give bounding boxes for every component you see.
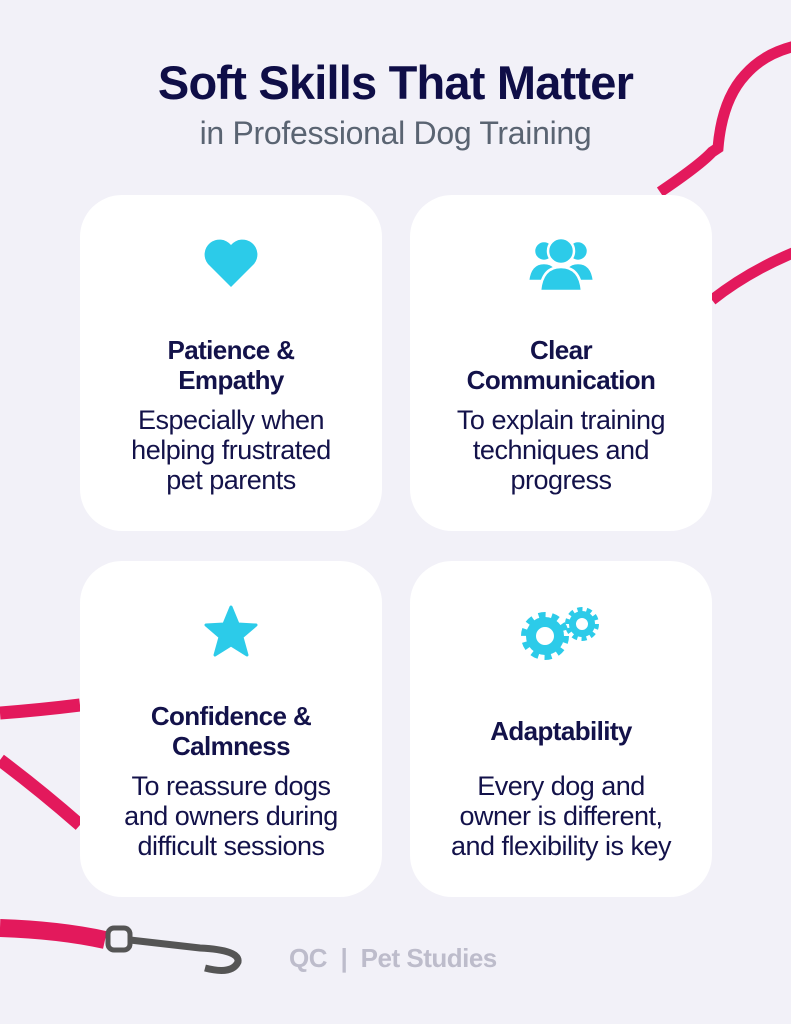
text: pet parents [166,465,296,495]
icon: people [530,239,592,290]
heading: Adaptability [490,716,632,746]
text [124,771,338,861]
text [457,405,665,495]
heading [151,701,311,761]
panel: adaptability [410,561,712,897]
heading: Communication [467,365,655,395]
icon: gears [521,607,599,660]
heading [168,335,294,395]
logo: QC | Pet Studies [289,943,497,973]
text: progress [510,465,612,495]
icon: heart [204,240,258,287]
text: Every dog and [477,771,645,801]
heading [467,335,655,395]
heading: Patience & [168,335,294,365]
text [451,771,672,861]
icon: star [204,606,258,657]
panel: patience [80,195,382,531]
text: To explain training [457,405,665,435]
heading: Confidence & [151,701,311,731]
text: techniques and [473,435,649,465]
title: Soft Skills That Matter [158,56,633,109]
text: Especially when [138,405,324,435]
heading: Clear [530,335,592,365]
text: helping frustrated [131,435,331,465]
text [131,405,331,495]
text: owner is different, [459,801,663,831]
text: and flexibility is key [451,831,671,861]
text: To reassure dogs [131,771,331,801]
panel: confidence [80,561,382,897]
heading: Calmness [172,731,290,761]
panel: communication [410,195,712,531]
subtitle: in Professional Dog Training [200,115,591,151]
text: difficult sessions [137,831,325,861]
heading: Empathy [178,365,284,395]
text: and owners during [124,801,338,831]
